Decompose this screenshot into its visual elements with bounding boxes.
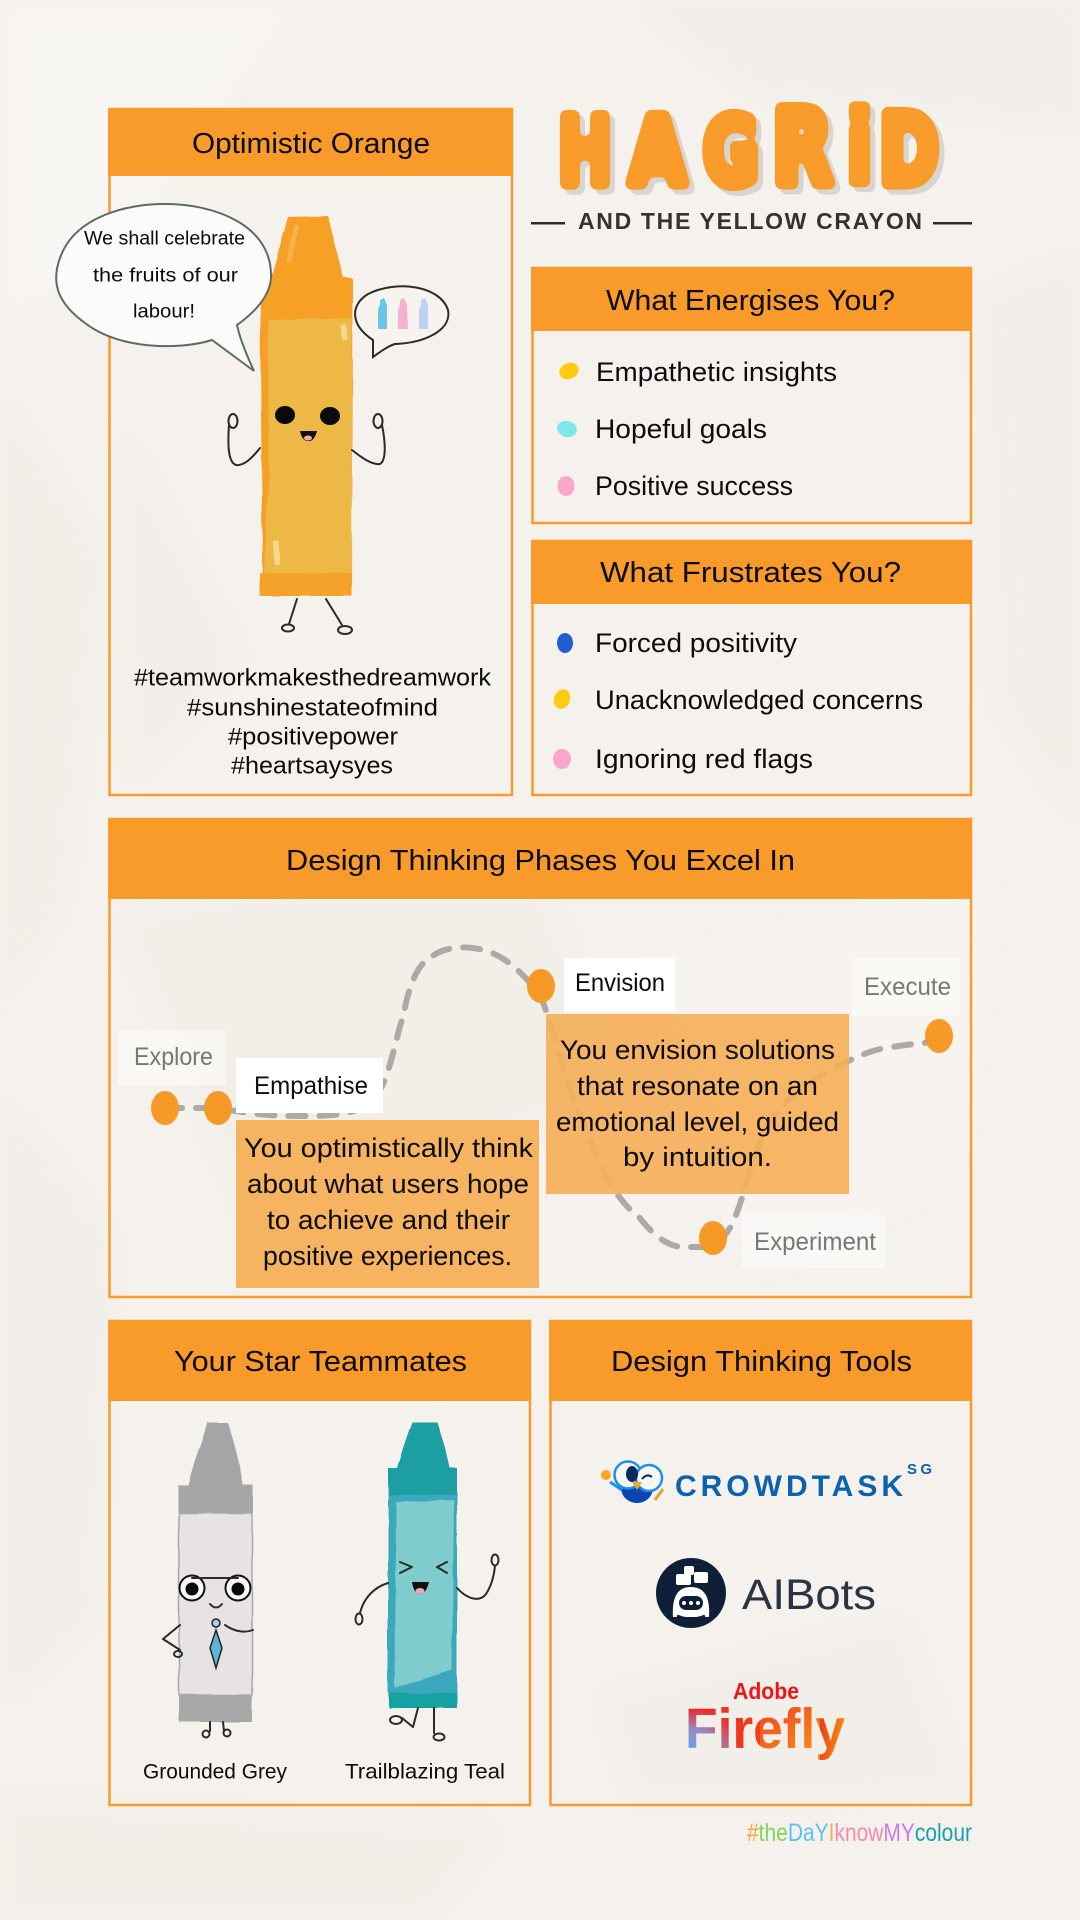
heading: Optimistic Orange: Optimistic Orange: [192, 128, 430, 160]
phase dot: Execute: [925, 1019, 953, 1053]
panel: What Energises You?: [531, 267, 972, 523]
title: HAGRiD: H: [558, 98, 612, 207]
speech bubble: the fruits of our: [93, 266, 239, 286]
logo: AIBots: [656, 1558, 876, 1628]
panel: Your Star Teammates: [108, 1320, 531, 1805]
label: Envision: Envision: [575, 969, 665, 997]
hashtags: [134, 664, 492, 780]
illustration: orange crayon: [228, 216, 385, 634]
illustration: grey crayon: [163, 1423, 253, 1738]
title: HAGRiD: R: [772, 87, 833, 209]
label: Explore: [118, 1030, 226, 1085]
panel: Design Thinking Tools: [549, 1320, 972, 1805]
callout: Empathise description: positive experiences.: [263, 1241, 512, 1271]
speech bubble: [56, 204, 271, 371]
speech bubble: We shall celebrate: [84, 228, 245, 250]
heading: Design Thinking Phases You Excel In: Design Thinking Phases You Excel In: [286, 845, 795, 877]
subtitle: and the yellow crayon: AND THE YELLOW CRAYON: [578, 208, 922, 234]
caption: Grounded Grey: Grounded Grey: [143, 1760, 287, 1784]
panel: Optimistic Orange: [56, 108, 513, 795]
illustration: teal crayon: [356, 1422, 498, 1740]
icon: owl mascot: [601, 1462, 663, 1503]
thought bubble: paint bottles: [355, 286, 448, 357]
heading: Your Star Teammates: Your Star Teammates: [174, 1346, 467, 1378]
logo: CrowdTask SG: CROWDTASK: [675, 1470, 903, 1503]
dashed journey path: [165, 947, 936, 1247]
callout: Envision description: by intuition.: [623, 1142, 772, 1172]
label: Experiment: [742, 1215, 885, 1268]
callout: Empathise description: [236, 1120, 539, 1288]
hashtags: #heartsaysyes: [231, 752, 393, 780]
heading: What Energises You?: What Energises You?: [606, 285, 895, 317]
footer hashtag: #theDaYIknowMYcolour: [747, 1819, 972, 1847]
label: Experiment: Experiment: [754, 1228, 876, 1256]
label: Execute: [852, 958, 960, 1016]
hashtags: #sunshinestateofmind: [187, 694, 438, 722]
label: Envision: [564, 958, 675, 1012]
logo: Adobe Firefly: Adobe: [733, 1678, 799, 1704]
item: Forced positivity: Forced positivity: [595, 628, 798, 658]
label: Empathise: [236, 1058, 383, 1113]
hashtags: #positivepower: [228, 724, 398, 750]
label: Empathise: Empathise: [254, 1072, 368, 1100]
logo: AIBots: AIBots: [742, 1571, 876, 1619]
label: Explore: Explore: [134, 1043, 213, 1071]
glasses and face: [180, 1576, 250, 1608]
title: HAGRiD: i: [844, 87, 875, 209]
phase dot: Explore: [151, 1091, 179, 1125]
face: [275, 406, 340, 441]
hashtags: #teamworkmakesthedreamwork: [134, 664, 492, 692]
callout: Envision description: You envision solutions: [560, 1035, 835, 1065]
speech bubble: labour!: [133, 302, 195, 322]
callout: Envision description: [546, 1014, 849, 1194]
face: [400, 1562, 447, 1594]
phase dot: Experiment: [699, 1221, 727, 1255]
callout: Empathise description: You optimistically think: [244, 1133, 534, 1163]
title: HAGRiD: G: [703, 98, 759, 207]
item: Positive success: Positive success: [595, 471, 793, 501]
item: Empathetic insights: Empathetic insights: [596, 357, 837, 387]
panel: Design Thinking Phases: [108, 818, 972, 1297]
item: Ignoring red flags: Ignoring red flags: [595, 744, 813, 774]
panel: What Frustrates You?: [531, 540, 972, 795]
callout: Envision description: emotional level, guided: [556, 1107, 839, 1137]
arms and legs: [356, 1554, 498, 1740]
logo: CrowdTask SG: [601, 1461, 932, 1503]
title: HAGRiD: D: [879, 94, 939, 208]
heading: What Frustrates You?: What Frustrates You?: [600, 557, 901, 589]
callout: Empathise description: about what users hope: [247, 1169, 529, 1199]
arms and legs: [228, 414, 385, 634]
logo: CrowdTask SG: SG: [907, 1461, 932, 1478]
callout: Empathise description: to achieve and their: [267, 1205, 510, 1235]
logo: Adobe Firefly: Firefly: [685, 1697, 845, 1761]
tie: [210, 1619, 222, 1668]
item: Hopeful goals: Hopeful goals: [595, 414, 767, 444]
heading: Design Thinking Tools: Design Thinking Tools: [611, 1346, 912, 1378]
callout: Envision description: that resonate on an: [577, 1071, 818, 1101]
arms and legs: [163, 1625, 253, 1738]
label: Execute: Execute: [864, 973, 951, 1001]
phase dot: Empathise: [204, 1091, 232, 1125]
caption: Trailblazing Teal: Trailblazing Teal: [345, 1760, 505, 1784]
title: HAGRiD: [558, 87, 939, 209]
phase dot: Envision: [527, 969, 555, 1003]
title: HAGRiD: A: [629, 98, 686, 207]
item: Unacknowledged concerns: Unacknowledged concerns: [595, 685, 923, 715]
